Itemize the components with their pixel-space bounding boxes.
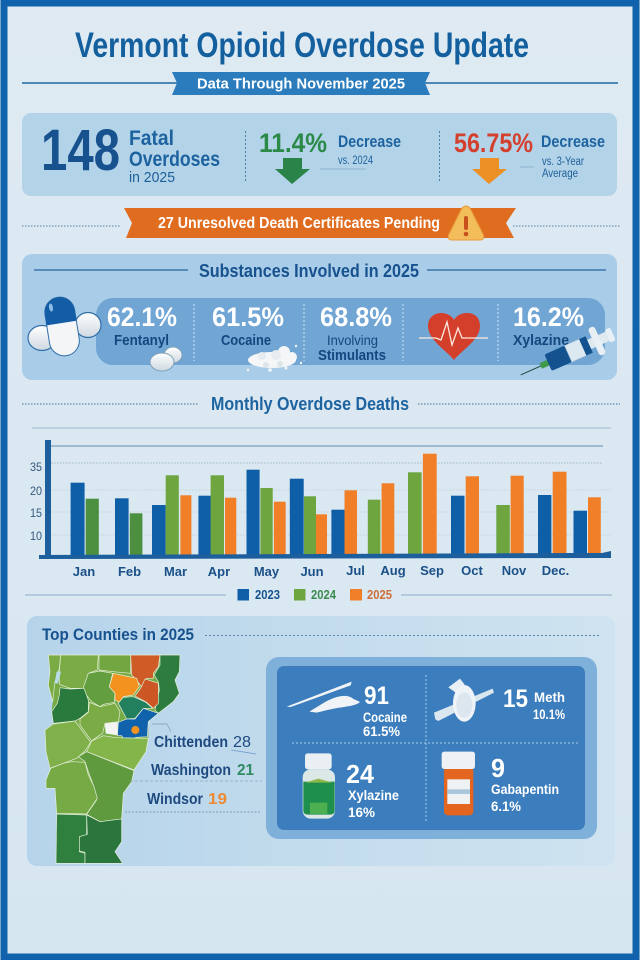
- icon: heart with pulse line: [419, 313, 488, 360]
- month labels: Apr: [208, 564, 230, 579]
- month labels: [73, 563, 569, 579]
- stat: meth count: 10.1%: [533, 707, 565, 722]
- stat: stimulants: Stimulants: [318, 347, 386, 364]
- panel: drug counts: [266, 657, 597, 839]
- stat: stimulants: 68.8%: [320, 302, 392, 332]
- month labels: Nov: [502, 563, 527, 578]
- y axis labels: [30, 460, 42, 543]
- county list: Washington: [151, 762, 231, 779]
- chart legend: 2023: [255, 587, 280, 602]
- y axis labels: 20: [30, 484, 42, 498]
- county list: 28: [233, 734, 251, 751]
- stat: 56.75% decrease vs 3-year average: 56.75%: [454, 128, 533, 158]
- stat: 11.4% decrease vs 2024: vs. 2024: [338, 153, 373, 167]
- alert ribbon: unresolved death certificates: 27 Unresolved Death Certificates Pending: [158, 215, 440, 232]
- stat: cocaine: 61.5%: [212, 302, 284, 332]
- stat: gabapentin count: [491, 753, 559, 814]
- date ribbon: [22, 72, 618, 95]
- y axis labels: 35: [30, 460, 42, 474]
- stat: meth count: [503, 685, 565, 722]
- icon: pills and capsule: [28, 295, 101, 358]
- month labels: Sep: [420, 563, 444, 578]
- stat: 148 fatal overdoses: in 2025: [129, 169, 175, 186]
- stat: cocaine count: 61.5%: [363, 724, 400, 739]
- stat: fentanyl: Fentanyl: [114, 332, 169, 349]
- alert ribbon: unresolved death certificates: [22, 206, 620, 240]
- month labels: Mar: [164, 564, 187, 579]
- stat: cocaine count: [363, 682, 407, 739]
- stat: 148 fatal overdoses: Overdoses: [129, 148, 220, 171]
- month labels: Jan: [73, 564, 95, 579]
- icon: orange down arrow: [472, 158, 507, 184]
- y axis labels: 15: [30, 506, 42, 520]
- icon: cocaine powder: [247, 345, 302, 372]
- county list: 21: [237, 762, 254, 779]
- stat: 11.4% decrease vs 2024: [259, 128, 401, 184]
- stat: gabapentin count: 9: [491, 753, 505, 783]
- heading: top counties: Top Counties in 2025: [42, 626, 194, 644]
- county list: Windsor: [147, 791, 203, 808]
- title: Vermont Opioid Overdose Update: [75, 26, 529, 65]
- county list: Chittenden: [154, 734, 228, 751]
- month labels: Jun: [300, 564, 324, 579]
- icon: meth pipe: [434, 679, 494, 722]
- month labels: Dec.: [542, 563, 569, 578]
- stat: 148 fatal overdoses: Fatal: [129, 127, 174, 150]
- stat: 56.75% decrease vs 3-year average: vs. 3-Year: [542, 156, 584, 168]
- stat: xylazine: [513, 302, 584, 349]
- bar chart: monthly overdose deaths: [30, 428, 611, 579]
- month labels: Aug: [380, 563, 406, 578]
- icon: xylazine vial: [303, 753, 335, 819]
- bars: 2025: [180, 454, 601, 557]
- icon: green down arrow: [275, 158, 310, 184]
- stat: 148 fatal overdoses: [41, 118, 220, 186]
- y axis labels: 10: [30, 529, 42, 543]
- icon: gabapentin bottle: [442, 752, 475, 815]
- stat: 56.75% decrease vs 3-year average: [454, 128, 605, 184]
- panel: substances involved: [22, 254, 619, 389]
- map: Vermont counties: [45, 655, 180, 863]
- stat: fentanyl: [107, 302, 177, 349]
- stat: cocaine: Cocaine: [221, 332, 271, 349]
- stat: 11.4% decrease vs 2024: Decrease: [338, 132, 401, 151]
- month labels: May: [254, 564, 280, 579]
- stat: meth count: Meth: [534, 690, 565, 705]
- stat: stimulants: Involving: [327, 332, 378, 348]
- stat: xylazine: 16.2%: [513, 302, 584, 332]
- stat: xylazine count: 24: [346, 759, 375, 789]
- stat: 148 fatal overdoses: 148: [41, 118, 120, 183]
- month labels: Jul: [346, 563, 365, 578]
- stat: gabapentin count: Gabapentin: [491, 782, 559, 797]
- date ribbon: Data Through November 2025: [197, 76, 405, 92]
- panel: top counties: [27, 616, 615, 866]
- stat: 56.75% decrease vs 3-year average: Average: [542, 168, 578, 180]
- chart legend: [25, 587, 612, 602]
- stat: meth count: 15: [503, 685, 528, 713]
- stat: xylazine: Xylazine: [513, 332, 569, 349]
- chart axes: [39, 440, 611, 559]
- county list: 19: [208, 791, 227, 808]
- stat: xylazine count: Xylazine: [348, 788, 399, 803]
- heading: substances involved: Substances Involved in 2025: [199, 261, 419, 281]
- stat: stimulants: [318, 302, 392, 364]
- icon: small tablets: [150, 347, 182, 371]
- icon: syringe: [515, 320, 619, 389]
- heading: monthly overdose deaths: Monthly Overdose Deaths: [211, 394, 409, 414]
- chart legend: 2024: [311, 587, 337, 602]
- stat: gabapentin count: 6.1%: [491, 799, 521, 814]
- stat: xylazine count: 16%: [348, 805, 375, 820]
- month labels: Feb: [118, 564, 141, 579]
- stat: cocaine count: 91: [364, 682, 389, 710]
- stat: cocaine count: Cocaine: [363, 710, 407, 725]
- stat: xylazine count: [346, 759, 399, 820]
- icon: cocaine lines: [287, 682, 360, 713]
- county list: [125, 724, 262, 812]
- stat: 11.4% decrease vs 2024: 11.4%: [259, 128, 327, 158]
- icon: warning triangle: [448, 206, 484, 240]
- bars: 2023: [71, 470, 587, 557]
- panel: headline statistics: [22, 113, 617, 196]
- stat: 56.75% decrease vs 3-year average: Decrease: [541, 132, 605, 151]
- stat: cocaine: [212, 302, 284, 349]
- stat: fentanyl: 62.1%: [107, 302, 177, 332]
- bars: 2024: [86, 472, 510, 557]
- month labels: Oct: [461, 563, 484, 578]
- chart legend: 2025: [367, 587, 392, 602]
